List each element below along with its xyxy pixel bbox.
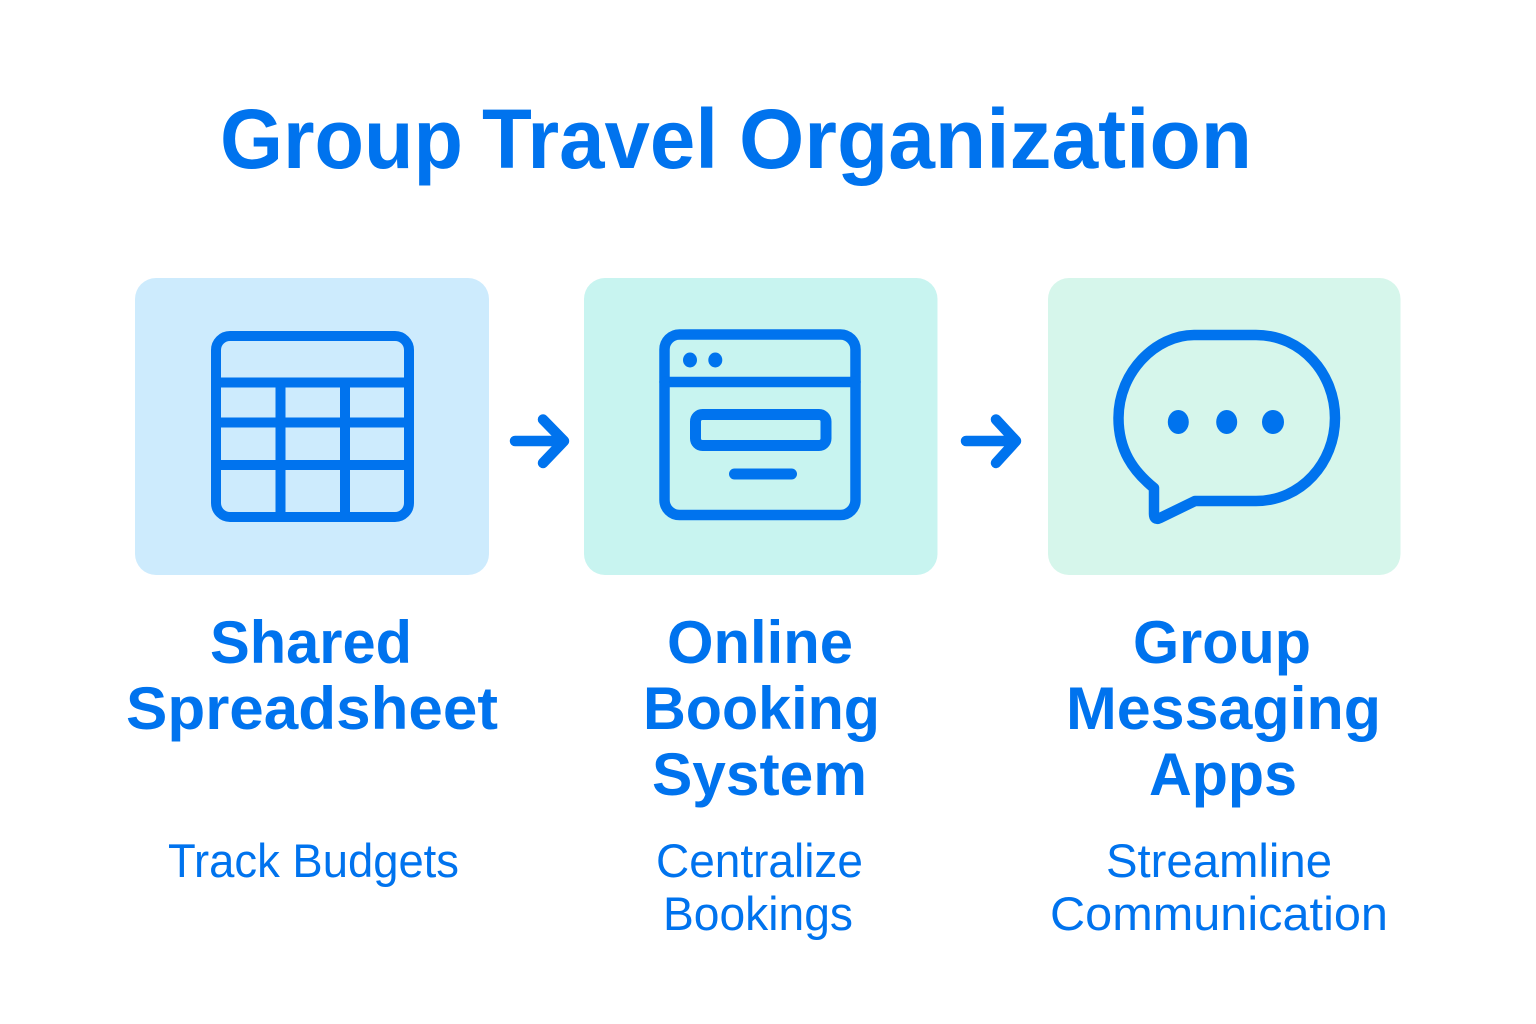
arrow: booking to messaging: [966, 420, 1016, 463]
arrow: spreadsheet to booking: [515, 420, 564, 463]
icon: spreadsheet table: [216, 336, 409, 517]
icon: chat bubble: [1118, 335, 1335, 519]
heading: Group Messaging Apps: Group: [1133, 609, 1311, 676]
heading: Shared Spreadsheet: Spreadsheet: [126, 675, 498, 742]
heading: Group Messaging Apps: Messaging: [1066, 675, 1381, 742]
panel background: teal: [584, 278, 938, 575]
panel: shared spreadsheet: [135, 278, 489, 575]
panel: group messaging apps: [1048, 278, 1400, 575]
heading: Shared Spreadsheet: Shared: [210, 609, 412, 676]
panel background: blue: [135, 278, 489, 575]
text: Centralize Bookings: Centralize: [656, 834, 863, 887]
text: Streamline Communication: Streamline: [1106, 834, 1332, 887]
heading: Shared Spreadsheet: [126, 609, 498, 742]
text: Track Budgets: Track Budgets: [168, 834, 459, 887]
heading: Group Messaging Apps: [1066, 609, 1381, 808]
title: Organization: [739, 92, 1252, 186]
text: Streamline Communication: Communication: [1050, 887, 1388, 940]
text: Streamline Communication: [1050, 834, 1388, 940]
text: Centralize Bookings: [656, 834, 863, 940]
heading: Online Booking System: [643, 609, 880, 808]
text: Centralize Bookings: Bookings: [663, 887, 853, 940]
heading: Online Booking System: Booking: [643, 675, 880, 742]
panel: online booking system: [584, 278, 938, 575]
icon: browser window: [664, 334, 856, 515]
heading: Online Booking System: System: [652, 741, 867, 808]
heading: Online Booking System: Online: [667, 609, 853, 676]
title: Travel: [482, 92, 718, 186]
title: Group: [220, 92, 463, 186]
title: [220, 92, 1252, 186]
panel background: mint: [1048, 278, 1400, 575]
heading: Group Messaging Apps: Apps: [1149, 741, 1297, 808]
